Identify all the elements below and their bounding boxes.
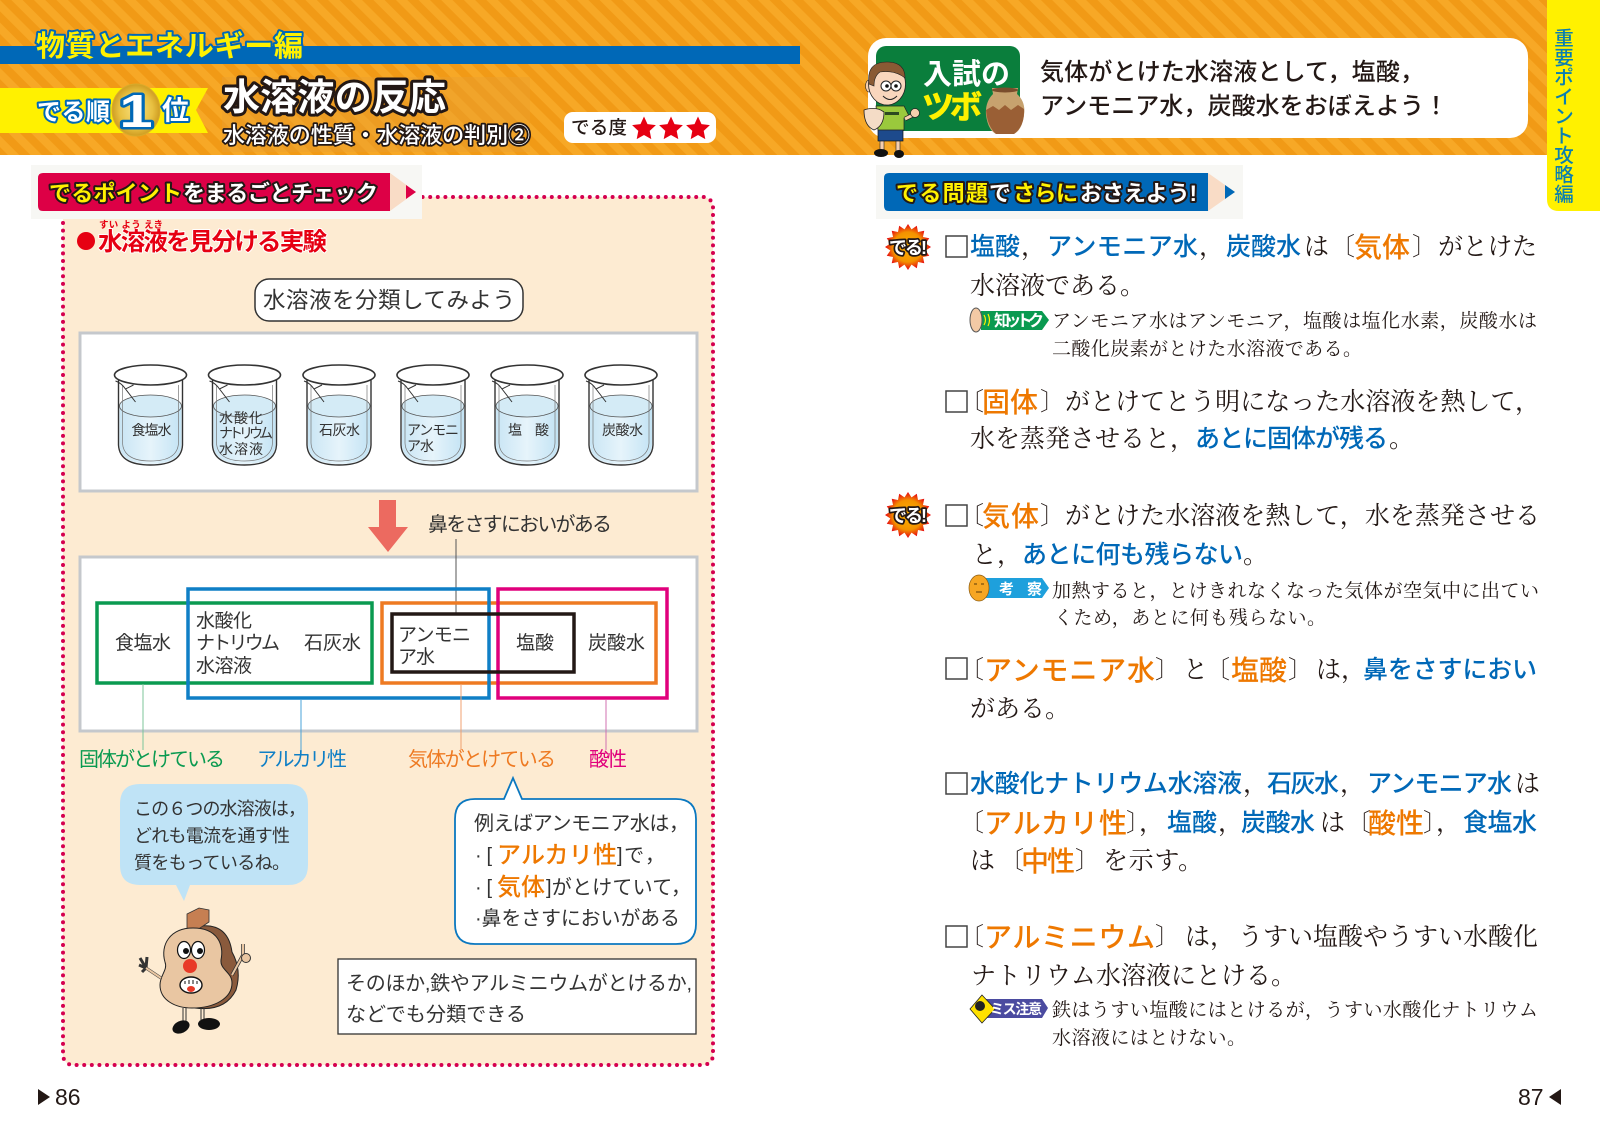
question 1: 気体 — [1354, 232, 1410, 263]
beaker: ammonia — [397, 365, 469, 465]
question 5: は — [970, 848, 995, 875]
beaker panel — [80, 333, 697, 491]
question 3 — [946, 501, 1540, 569]
question 5: 〔 — [999, 847, 1024, 875]
side tab text: ポ — [1554, 67, 1574, 89]
note: trivia: アンモニア水はアンモニア，塩酸は塩化水素，炭酸水は — [1052, 310, 1537, 332]
bullet smell: ·鼻をさすにおいがある — [475, 907, 680, 930]
heading text: でるポイント — [49, 181, 182, 206]
bullet gas — [475, 874, 691, 901]
question 3: 〕 — [1040, 502, 1065, 530]
icon: boy character — [864, 62, 920, 158]
bullet alkaline: ·[ — [475, 845, 492, 867]
question 2: 固体 — [982, 387, 1038, 418]
badge: deru 2: でる! — [889, 506, 927, 526]
question 5: 炭酸水 — [1241, 809, 1315, 837]
question 3: 。 — [1243, 542, 1268, 569]
question 1: 炭酸水 — [1226, 233, 1301, 261]
question 5: 食塩水 — [1463, 809, 1537, 837]
left heading pencil — [31, 165, 422, 219]
bullet gas: 気体 — [497, 874, 545, 901]
section title: 物質とエネルギー編 — [36, 30, 303, 63]
note: trivia: 二酸化炭素がとけた水溶液である。 — [1052, 338, 1362, 360]
blue set — [188, 589, 489, 698]
page number right: 87 — [1518, 1084, 1544, 1110]
note: consideration: 加熱すると，とけきれなくなった気体が空気中に出てい — [1052, 580, 1539, 602]
speech bubble blue: この６つの水溶液は， — [134, 799, 306, 819]
item labels: ナトリウム — [196, 633, 280, 654]
note: caution: 鉄はうすい塩酸にはとけるが，うすい水酸化ナトリウム — [1052, 999, 1538, 1021]
badge text top: 入試の — [923, 58, 1010, 91]
question 3: 〔 — [959, 502, 984, 530]
question 5: 〔 — [959, 809, 984, 837]
question 1: アンモニア水 — [1047, 233, 1198, 261]
question 4: 〕 — [1155, 656, 1180, 684]
side tab text: ン — [1554, 106, 1574, 128]
beaker: sodium hydroxide — [208, 365, 280, 465]
stars — [632, 116, 710, 139]
bullet gas: ·[ — [475, 877, 492, 899]
question 4: アンモニア水 — [984, 655, 1155, 686]
item labels: 食塩水 — [115, 632, 171, 654]
question 1 — [946, 232, 1537, 300]
heading text: でる問題 — [896, 181, 988, 206]
icon: pot mascot — [139, 908, 250, 1036]
bullet alkaline — [475, 842, 665, 869]
item labels: アンモニ — [398, 625, 471, 646]
right heading pencil — [876, 165, 1243, 219]
beaker: hydrochloric acid: 酸 — [535, 422, 549, 438]
question 5: ， — [1243, 771, 1268, 798]
left page panel — [63, 197, 713, 1065]
experiment heading — [77, 220, 328, 256]
note: consideration: くため，あとに何も残らない。 — [1054, 607, 1326, 629]
beaker: hydrochloric acid — [491, 365, 563, 465]
question 6: ナトリウム水溶液にとける。 — [971, 962, 1296, 990]
question 1: 〕 — [1412, 233, 1437, 261]
item labels: 石灰水 — [304, 632, 361, 654]
classify label: 水溶液を分類してみよう — [263, 288, 515, 313]
question 4: 塩酸 — [1231, 655, 1287, 686]
question 6: は， — [1185, 924, 1235, 951]
smell label: 鼻をさすにおいがある — [428, 513, 612, 536]
heading text: おさえよう! — [1080, 181, 1197, 206]
beaker: ammonia: ア水 — [407, 438, 434, 454]
smell leader line — [455, 539, 457, 614]
question 6: アルミニウム — [984, 922, 1155, 953]
bullet alkaline: ]で， — [617, 845, 665, 867]
question 1: 水溶液である。 — [970, 272, 1145, 300]
question 5: 〕， — [1126, 809, 1164, 837]
question 5: は — [1320, 810, 1345, 837]
question 2: 〕 — [1040, 388, 1065, 416]
title backdrop — [222, 77, 530, 152]
question 4: 〔 — [959, 656, 984, 684]
question 5: 石灰水 — [1267, 770, 1339, 798]
side tab text: 編 — [1554, 184, 1574, 206]
note: caution — [970, 995, 1538, 1049]
question 4: がある。 — [970, 696, 1070, 723]
question 2: 〔 — [959, 388, 984, 416]
property labels: 気体がとけている — [408, 748, 556, 771]
question 2: 。 — [1389, 426, 1414, 453]
heading text: をまるごとチェック — [183, 181, 378, 206]
beaker: limewater: 石灰水 — [319, 422, 360, 438]
frequency rating — [564, 112, 716, 143]
question 4: 〕 — [1288, 656, 1313, 684]
page number right — [1518, 1084, 1561, 1110]
page number left: 86 — [55, 1084, 81, 1110]
question 3: がとけた水溶液を熱して，水を蒸発させる — [1065, 502, 1540, 530]
question 4: と — [1183, 657, 1208, 684]
property labels — [79, 748, 627, 771]
rank suffix: 位 — [162, 96, 189, 126]
item labels: ア水 — [398, 646, 435, 668]
property labels: アルカリ性 — [257, 748, 347, 771]
speech bubble blue: どれも電流を通す性 — [134, 826, 290, 846]
bullet alkaline: アルカリ性 — [497, 842, 617, 869]
question 4 — [946, 655, 1537, 723]
main title: 水溶液の反応 — [223, 77, 446, 118]
tip text: アンモニア水，炭酸水をおぼえよう！ — [1040, 93, 1448, 120]
note box — [338, 959, 696, 1034]
item labels — [115, 610, 645, 677]
question 6: うすい塩酸やうすい水酸化 — [1238, 923, 1538, 951]
property labels: 酸性 — [589, 748, 627, 771]
question 2 — [946, 387, 1540, 453]
beaker: hydrochloric acid: 塩 — [508, 422, 522, 438]
question 6: 〔 — [959, 923, 984, 951]
ruby: すい よう えき — [99, 220, 163, 231]
black set — [392, 614, 574, 672]
note box: そのほか,鉄やアルミニウムがとけるか, — [346, 972, 692, 995]
side tab text: 要 — [1554, 48, 1574, 70]
question 6 — [946, 922, 1538, 990]
question 5: 〔 — [1346, 809, 1371, 837]
question 5: 酸性 — [1368, 808, 1424, 839]
question 5: 塩酸 — [1167, 809, 1217, 837]
side tab text: 重 — [1554, 28, 1574, 50]
question 3: と， — [972, 542, 1022, 569]
rank label: でる順 — [37, 99, 110, 126]
question 5: 〕 — [1075, 847, 1100, 875]
side tab text: ト — [1554, 126, 1574, 148]
question 1: 塩酸 — [970, 233, 1020, 261]
tip text: 気体がとけた水溶液として，塩酸， — [1040, 59, 1424, 86]
frequency rating: でる度 — [571, 117, 627, 138]
question 2: 水を蒸発させると， — [970, 425, 1195, 453]
question 1: がとけた — [1438, 234, 1537, 261]
classification diagram — [80, 539, 697, 731]
experiment heading: 水溶液を見分ける実験 — [98, 228, 328, 256]
question 5: ， — [1340, 771, 1365, 798]
tip badge — [876, 46, 1020, 131]
speech bubble white: 例えばアンモニア水は， — [474, 812, 689, 835]
badge: deru 1: でる! — [889, 238, 927, 258]
note: consideration: 考 察 — [999, 580, 1042, 598]
orange header band — [0, 0, 1600, 155]
beaker: limewater — [303, 365, 375, 465]
beaker: sodium hydroxide: 水酸化 — [219, 410, 263, 426]
question 5: 中性 — [1021, 846, 1075, 877]
question 1: ， — [1021, 234, 1046, 261]
side tab text: 略 — [1554, 164, 1574, 186]
badge: deru 1 — [885, 224, 931, 270]
beaker: carbonated water — [585, 365, 657, 465]
question 4: 鼻をさすにおい — [1363, 656, 1537, 684]
property labels: 固体がとけている — [79, 748, 225, 771]
note: caution: ミス注意 — [990, 1001, 1042, 1017]
question 5: 〕， — [1423, 809, 1461, 837]
question 1: は — [1304, 234, 1329, 261]
question 5 — [946, 770, 1540, 877]
subtitle: 水溶液の性質・水溶液の判別② — [223, 123, 530, 148]
badge: deru 2 — [885, 492, 931, 538]
arrow down — [368, 500, 408, 552]
bullet gas: ]がとけていて， — [546, 876, 691, 899]
question 3: あとに何も残らない — [1022, 541, 1243, 569]
question 5: アルカリ性 — [984, 808, 1127, 839]
rank ribbon — [0, 84, 208, 137]
question 6: 〕 — [1155, 923, 1180, 951]
question 1: 〔 — [1330, 233, 1355, 261]
beaker: ammonia: アンモニ — [407, 422, 459, 438]
gold medal: 1 — [119, 86, 153, 137]
question 2: あとに固体が残る — [1195, 425, 1388, 453]
note box: などでも分類できる — [346, 1003, 526, 1026]
page number left — [38, 1084, 81, 1110]
question 3: 気体 — [982, 501, 1039, 532]
heading text — [896, 181, 1197, 206]
tip text — [1040, 59, 1448, 120]
item labels: 水溶液 — [196, 655, 252, 677]
classify label — [255, 279, 523, 321]
beaker: salt water: 食塩水 — [132, 422, 172, 438]
question 5: 水酸化ナトリウム水溶液 — [970, 770, 1242, 798]
note: trivia: 知ットク — [994, 311, 1044, 330]
beaker: sodium hydroxide: 水溶液 — [219, 441, 263, 457]
magenta set — [498, 589, 667, 698]
speech bubble blue: 質をもっているね。 — [134, 853, 290, 873]
item labels: 炭酸水 — [588, 632, 645, 654]
exam tip panel — [864, 38, 1528, 158]
heading text: で — [989, 181, 1011, 206]
side tab text: イ — [1554, 86, 1574, 108]
beaker: salt water — [114, 365, 186, 465]
question 5: を示す。 — [1103, 848, 1203, 875]
question 1: ， — [1199, 234, 1224, 261]
note: caution: 水溶液にはとけない。 — [1052, 1027, 1246, 1049]
badge text bottom: ツボ — [922, 89, 982, 125]
icon: pot — [986, 88, 1024, 134]
side tab — [1547, 0, 1600, 211]
heading text: さらに — [1013, 181, 1078, 206]
item labels: 塩酸 — [516, 632, 554, 654]
question 4: は， — [1316, 657, 1366, 684]
question 5: ， — [1218, 810, 1243, 837]
green set — [97, 603, 372, 683]
question 2: がとけてとう明になった水溶液を熱して， — [1065, 388, 1540, 416]
question 5: アンモニア水 — [1367, 770, 1512, 798]
orange set — [382, 603, 656, 683]
heading text — [49, 181, 378, 206]
speech bubble blue — [120, 784, 308, 901]
question 4: 〔 — [1205, 656, 1230, 684]
side tab text: 攻 — [1554, 145, 1574, 167]
section bar — [0, 30, 800, 64]
gold medal — [112, 84, 160, 137]
note: consideration — [969, 575, 1539, 629]
note: trivia — [970, 308, 1537, 360]
leader lines — [143, 684, 606, 750]
speech bubble white — [455, 778, 696, 944]
beaker: carbonated water: 炭酸水 — [602, 422, 643, 438]
item labels: 水酸化 — [196, 610, 252, 632]
beaker: sodium hydroxide: ナトリウム — [219, 425, 273, 441]
question 5: は — [1515, 771, 1540, 798]
